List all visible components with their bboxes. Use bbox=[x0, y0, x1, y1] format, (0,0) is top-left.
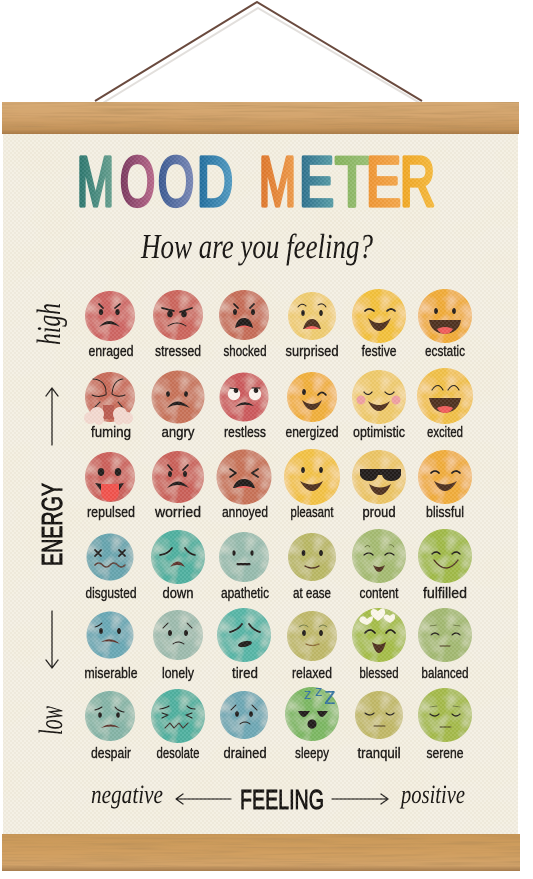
face: balanced: balanced bbox=[422, 666, 468, 682]
arrow: up bbox=[46, 388, 58, 445]
face: relaxed: relaxed bbox=[292, 666, 332, 682]
face: blissful: blissful bbox=[426, 505, 464, 521]
axis label: ENERGY: ENERGY bbox=[37, 483, 69, 566]
face: miserable bbox=[84, 612, 138, 682]
face: tired bbox=[217, 608, 271, 682]
face: sleepy bbox=[285, 683, 339, 762]
face: drained bbox=[220, 691, 268, 762]
face: enraged: enraged bbox=[88, 344, 134, 360]
face: content bbox=[352, 529, 406, 602]
face: restless: restless bbox=[224, 425, 266, 441]
face: pleasant bbox=[284, 449, 340, 521]
face: disgusted: disgusted bbox=[86, 586, 136, 602]
top wooden bar bbox=[2, 102, 519, 134]
face: apathetic: apathetic bbox=[221, 586, 269, 602]
face: optimistic: optimistic bbox=[353, 425, 405, 441]
arrow: left bbox=[176, 794, 231, 804]
face: fuming bbox=[84, 372, 135, 441]
face: shocked bbox=[219, 290, 269, 360]
face: sleepy: z bbox=[304, 686, 312, 703]
face: excited bbox=[417, 368, 473, 441]
face: lonely: lonely bbox=[162, 666, 195, 682]
face: blissful bbox=[418, 450, 472, 521]
face: festive: festive bbox=[362, 344, 396, 360]
title: T bbox=[335, 142, 369, 220]
face: down bbox=[151, 530, 205, 602]
face: disgusted bbox=[86, 534, 136, 602]
face: worried: worried bbox=[154, 505, 201, 521]
face: proud: proud bbox=[362, 505, 396, 521]
face: proud bbox=[352, 450, 406, 521]
title: M bbox=[77, 142, 114, 220]
face: desolate: desolate bbox=[156, 746, 200, 762]
face: worried bbox=[152, 451, 204, 521]
subtitle: How are you feeling? bbox=[140, 227, 373, 266]
face: angry: angry bbox=[162, 425, 195, 441]
face: surprised: surprised bbox=[286, 344, 338, 360]
axis label: positive: positive bbox=[399, 780, 465, 809]
face: sleepy: z bbox=[324, 683, 336, 710]
face: serene: serene bbox=[426, 746, 464, 762]
face: ecstatic: ecstatic bbox=[425, 344, 465, 360]
axis label: low: low bbox=[33, 706, 70, 735]
face: surprised bbox=[286, 292, 338, 360]
face: stressed bbox=[153, 290, 203, 360]
face: tranquil: tranquil bbox=[358, 746, 400, 762]
face: desolate bbox=[151, 689, 205, 762]
fabric weave overlay bbox=[3, 134, 518, 834]
face: relaxed bbox=[287, 611, 337, 682]
canvas bbox=[3, 132, 518, 836]
face: down: down bbox=[162, 586, 194, 602]
face: ecstatic bbox=[418, 289, 472, 360]
face: tranquil bbox=[355, 691, 403, 762]
title: E bbox=[299, 142, 334, 220]
face: blessed bbox=[352, 608, 406, 682]
face: enraged bbox=[85, 291, 135, 360]
face: fulfilled bbox=[418, 529, 472, 602]
face: at ease bbox=[288, 533, 336, 602]
face: festive bbox=[352, 289, 406, 360]
face: restless bbox=[220, 372, 268, 441]
title: M bbox=[259, 142, 296, 220]
hanging rope bbox=[95, 2, 425, 106]
face: miserable: miserable bbox=[84, 666, 138, 682]
face: drained: drained bbox=[224, 746, 266, 762]
face: at ease: at ease bbox=[293, 586, 331, 602]
face: blessed: blessed bbox=[360, 666, 398, 682]
arrow: down bbox=[46, 611, 58, 668]
face: shocked: shocked bbox=[224, 344, 266, 360]
title: O bbox=[158, 142, 194, 220]
bottom wooden bar bbox=[2, 834, 520, 871]
face: lonely bbox=[153, 610, 203, 682]
face: repulsed: repulsed bbox=[87, 505, 135, 521]
title: O bbox=[120, 142, 155, 220]
face: repulsed bbox=[85, 452, 135, 521]
face: apathetic bbox=[219, 532, 269, 602]
axis label: negative: negative bbox=[91, 780, 163, 809]
face: optimistic bbox=[352, 370, 406, 441]
face: sleepy: z bbox=[315, 683, 322, 700]
face: balanced bbox=[418, 608, 472, 682]
face: angry bbox=[152, 370, 204, 441]
face: energized: energized bbox=[286, 425, 338, 441]
face: fuming: fuming bbox=[91, 425, 131, 441]
face: content: content bbox=[360, 586, 398, 602]
axis label: FEELING: FEELING bbox=[240, 784, 324, 815]
axis label: high: high bbox=[31, 303, 68, 345]
face: serene bbox=[418, 688, 472, 762]
arrow: right bbox=[332, 794, 388, 804]
face: despair: despair bbox=[91, 746, 131, 762]
face: energized bbox=[286, 372, 338, 441]
face: tired: tired bbox=[232, 666, 258, 682]
face: pleasant: pleasant bbox=[290, 505, 334, 521]
face: sleepy: sleepy bbox=[295, 746, 330, 762]
face: annoyed bbox=[216, 450, 272, 521]
face: annoyed: annoyed bbox=[222, 505, 268, 521]
title: E bbox=[366, 142, 401, 220]
title: D bbox=[197, 142, 233, 220]
face: excited: excited bbox=[427, 425, 463, 441]
face: fulfilled: fulfilled bbox=[423, 586, 467, 602]
title: R bbox=[400, 142, 435, 220]
face: despair bbox=[85, 691, 135, 762]
title bbox=[77, 142, 435, 220]
face: stressed: stressed bbox=[155, 344, 201, 360]
